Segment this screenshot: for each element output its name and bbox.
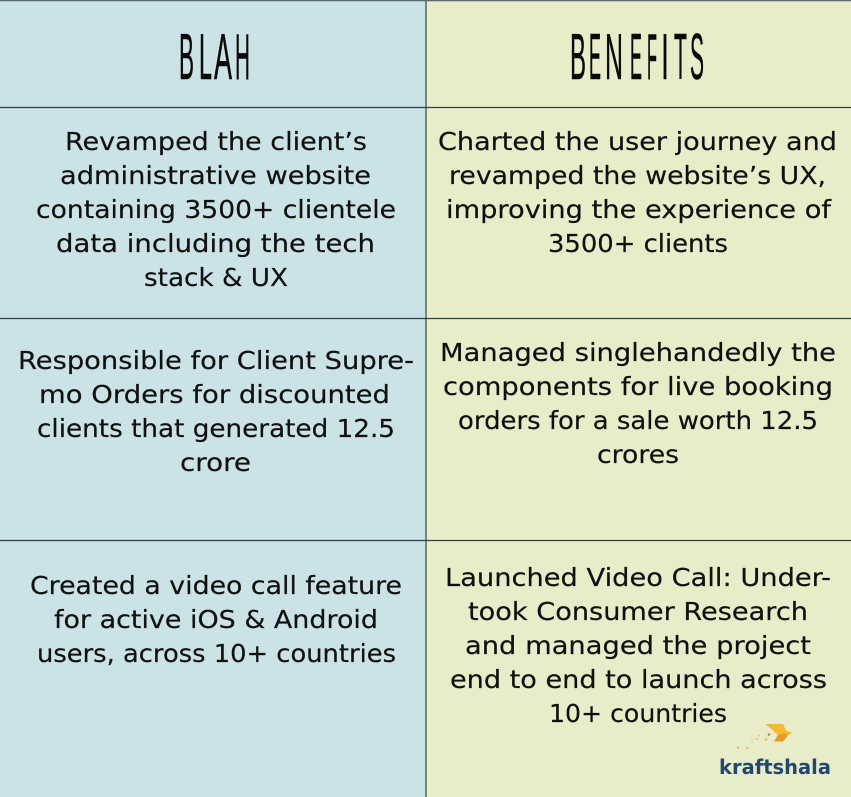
heading: Blah: B (179, 20, 194, 93)
heading: Blah (179, 20, 250, 93)
text block: row 3 left: users, across 10+ countries (37, 639, 396, 668)
text block: row 2 left (18, 346, 414, 477)
text block: row 3 right (445, 563, 831, 728)
heading: Blah: A (214, 20, 232, 93)
text: H (235, 20, 250, 93)
text block: row 3 left: Created a video call feature (30, 571, 402, 600)
heading: Benefits: N (605, 20, 623, 93)
text block: row 3 right: and managed the project (465, 631, 811, 660)
text: S (690, 20, 704, 93)
heading: Benefits: F (647, 20, 657, 93)
text block: row 1 left: data including the tech (56, 229, 375, 258)
text block: row 2 right (440, 338, 836, 469)
text block: row 1 right: improving the experience of (446, 195, 832, 224)
heading: Benefits: T (674, 20, 687, 93)
text block: row 2 left: Responsible for Client Supre- (18, 346, 414, 375)
text block: row 1 left: stack & UX (144, 263, 288, 292)
logo wordmark: kraftshala (719, 755, 831, 779)
text block: row 1 left: Revamped the client’s (65, 127, 367, 156)
text block: row 1 right: revamped the website’s UX, (449, 161, 826, 190)
text block: row 2 left: mo Orders for discounted (39, 380, 390, 409)
heading: Benefits (570, 20, 704, 93)
text block: row 2 right: components for live booking (443, 372, 833, 401)
logo: kraftshala (719, 724, 831, 779)
text block: row 1 right: Charted the user journey and (438, 127, 837, 156)
text block: row 1 left: administrative website (60, 161, 371, 190)
heading: Benefits: E (630, 20, 642, 93)
text block: row 1 left: containing 3500+ clientele (36, 195, 396, 224)
text block: row 1 right: 3500+ clients (548, 229, 728, 258)
text block: row 3 right: Launched Video Call: Under- (445, 563, 831, 592)
heading: Benefits: B (570, 20, 586, 93)
panel: left column background (0, 0, 426, 797)
text block: row 3 right: 10+ countries (549, 699, 727, 728)
heading: Benefits: I (661, 20, 669, 93)
text block: row 3 right: took Consumer Research (468, 597, 808, 626)
icon: golden bird (737, 724, 792, 749)
heading: Benefits: E (589, 20, 601, 93)
text block: row 2 right: Managed singlehandedly the (440, 338, 836, 367)
text block: row 2 left: crore (180, 448, 251, 477)
text block: row 3 left: for active iOS & Android (54, 605, 378, 634)
text block: row 2 right: crores (597, 440, 679, 469)
panel: right column background (426, 0, 851, 797)
text block: row 3 right: end to end to launch across (450, 665, 827, 694)
text block: row 2 right: orders for a sale worth 12.5 (458, 406, 818, 435)
text block: row 1 right (438, 127, 837, 258)
text block: row 1 left (36, 127, 396, 292)
heading: Blah: L (199, 20, 212, 93)
text block: row 2 left: clients that generated 12.5 (37, 414, 395, 443)
text block: row 3 left (30, 571, 402, 668)
